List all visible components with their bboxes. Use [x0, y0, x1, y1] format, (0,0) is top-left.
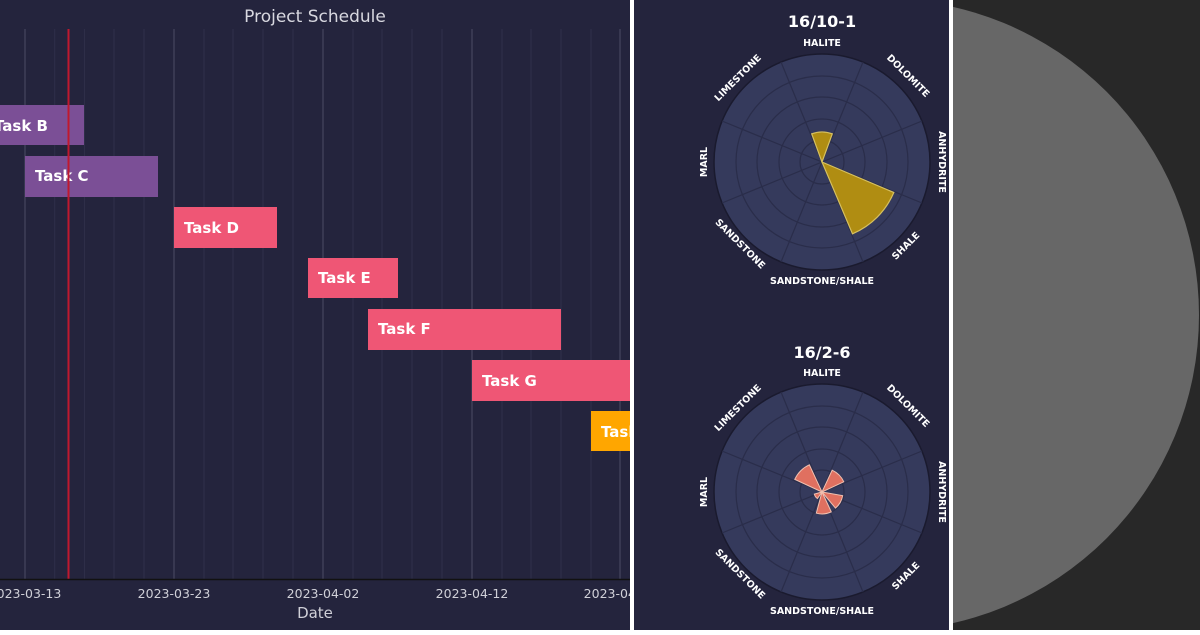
x axis — [0, 578, 630, 618]
polar chart 16/2-6: 16/2-6 — [793, 343, 851, 362]
task bars: Task E — [318, 269, 371, 287]
today line — [68, 29, 70, 579]
x axis: 2023-04-12 — [436, 586, 508, 601]
panel: gantt chart — [0, 0, 656, 630]
polar chart 16/10-1: MARL — [699, 147, 710, 177]
panel: polar charts — [634, 0, 949, 630]
x axis: 2023-04-02 — [287, 586, 359, 601]
task bars: Task H — [601, 423, 656, 441]
polar chart 16/2-6 — [699, 343, 947, 617]
polar chart 16/2-6: SANDSTONE/SHALE — [770, 606, 874, 617]
polar chart 16/10-1: HALITE — [803, 38, 841, 49]
x axis: 2023-04-22 — [584, 586, 656, 601]
task bars: Task D — [184, 219, 239, 237]
polar chart 16/10-1: ANHYDRITE — [936, 131, 947, 193]
task bars — [0, 105, 656, 451]
panel: gray circle — [953, 0, 1200, 630]
polar chart 16/10-1 — [699, 12, 947, 287]
polar chart 16/2-6: MARL — [699, 477, 710, 507]
polar chart 16/10-1: LIMESTONE — [713, 53, 764, 104]
polar chart 16/10-1: SANDSTONE/SHALE — [770, 276, 874, 287]
polar chart 16/2-6: ANHYDRITE — [936, 461, 947, 523]
task bars: Task C — [35, 167, 89, 185]
polar chart 16/2-6: HALITE — [803, 368, 841, 379]
task bars: Task G — [482, 372, 537, 390]
x axis: 2023-03-23 — [138, 586, 210, 601]
polar chart 16/10-1: SANDSTONE — [713, 217, 767, 271]
polar chart 16/2-6: SANDSTONE — [713, 547, 767, 601]
polar chart 16/10-1: 16/10-1 — [788, 12, 856, 31]
polar chart 16/2-6: DOLOMITE — [884, 383, 931, 430]
polar chart 16/10-1: SHALE — [890, 230, 922, 262]
x axis: Date — [297, 604, 333, 622]
polar chart 16/2-6: LIMESTONE — [713, 383, 764, 434]
task bars: Task F — [378, 320, 431, 338]
polar chart 16/10-1: DOLOMITE — [884, 53, 931, 100]
polar chart 16/2-6: SHALE — [890, 560, 922, 592]
title: Project Schedule — [244, 7, 386, 27]
